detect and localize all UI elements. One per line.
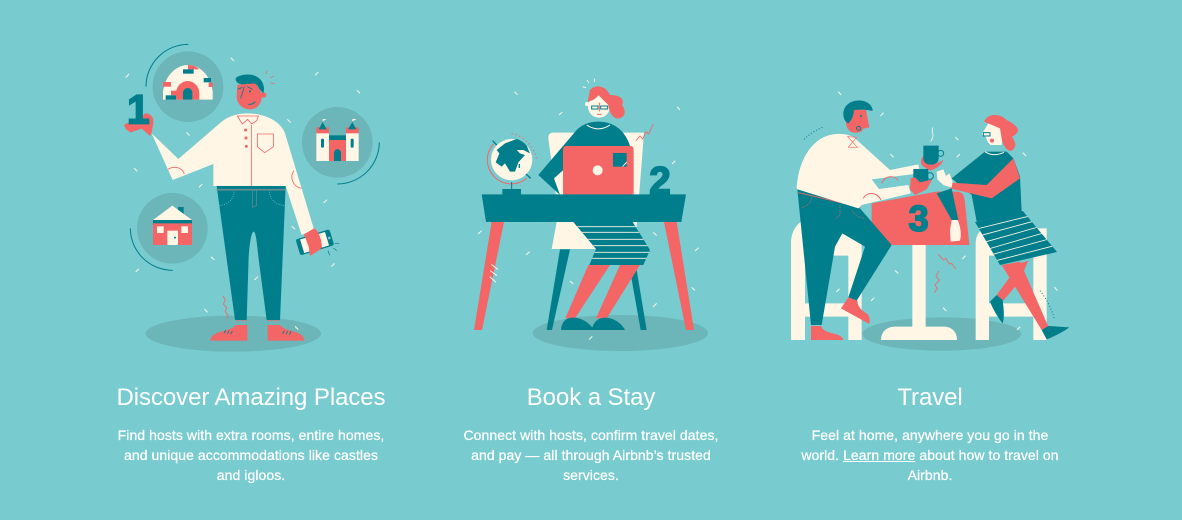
column: book xyxy=(464,384,718,483)
woman torso and arm xyxy=(538,122,633,195)
man shirt xyxy=(797,134,920,208)
text block xyxy=(801,427,1059,483)
striped skirt xyxy=(973,210,1057,265)
zigzag xyxy=(223,296,228,319)
text block: Find hosts with extra rooms, entire homes, xyxy=(118,427,384,443)
icon: castle badge xyxy=(302,107,373,178)
text block: and igloos. xyxy=(217,467,285,483)
striped skirt xyxy=(570,222,653,265)
sparkles xyxy=(837,92,1057,330)
text block: Airbnb. xyxy=(908,467,952,483)
sparkles xyxy=(478,92,698,339)
woman torso xyxy=(952,152,1022,222)
ground shadow xyxy=(146,316,321,352)
icon: igloo badge xyxy=(153,51,223,122)
text block: services. xyxy=(563,467,619,483)
laptop xyxy=(563,146,634,196)
woman other arm and hand xyxy=(937,188,961,242)
right stool xyxy=(976,228,1047,340)
zigzags xyxy=(934,254,956,293)
woman shoes xyxy=(561,318,625,330)
number 2: 2 xyxy=(649,160,671,203)
woman hand xyxy=(937,169,953,188)
left stool xyxy=(791,218,862,340)
woman arm xyxy=(950,158,1020,198)
man shoes xyxy=(210,325,304,341)
text block xyxy=(118,427,384,484)
ground shadow xyxy=(862,317,1021,351)
text block xyxy=(464,427,718,483)
ground shadow xyxy=(533,315,708,351)
dotted motion marks xyxy=(804,127,1054,318)
column: travel xyxy=(801,384,1059,483)
orbit arcs xyxy=(130,44,379,270)
woman legs xyxy=(997,252,1057,330)
coffee cups and hands xyxy=(910,127,944,195)
column: discover xyxy=(117,384,385,484)
man head xyxy=(843,100,873,133)
sparkles xyxy=(126,58,360,329)
text block: Feel at home, anywhere you go in the xyxy=(812,427,1048,443)
heading: Book a Stay xyxy=(527,384,655,411)
man shoes xyxy=(811,297,870,340)
necklace xyxy=(985,152,1004,155)
motion ticks xyxy=(266,71,275,84)
woman head xyxy=(583,79,625,118)
number 3: 3 xyxy=(909,198,929,239)
belt and pocket stitching xyxy=(217,190,291,335)
hand with phone xyxy=(296,228,339,256)
illustration: step 3 couple at table xyxy=(791,92,1069,351)
man trousers xyxy=(217,186,286,320)
desk xyxy=(474,194,694,330)
illustration: step 2 woman at desk xyxy=(474,79,708,351)
woman head xyxy=(982,115,1018,151)
buttons xyxy=(244,128,248,148)
illustration: step 1 man with places xyxy=(124,44,379,352)
text block: Connect with hosts, confirm travel dates, xyxy=(464,427,718,443)
text block: and unique accommodations like castles xyxy=(124,447,378,463)
necklace xyxy=(587,125,610,129)
heading: Discover Amazing Places xyxy=(117,384,385,411)
icon: house badge xyxy=(137,193,208,264)
text block: world. Learn more about how to travel on xyxy=(801,447,1059,463)
man trousers xyxy=(797,189,892,325)
man head xyxy=(236,75,266,109)
shirt details xyxy=(168,116,301,188)
heading: Travel xyxy=(897,384,963,411)
zigzag xyxy=(636,124,653,141)
globe xyxy=(487,134,537,195)
number 1: 1 xyxy=(127,86,150,132)
raised hand xyxy=(124,113,153,136)
elbow patches and bow tie xyxy=(848,137,898,200)
text block: and pay — all through Airbnb’s trusted xyxy=(471,447,711,463)
table xyxy=(872,192,969,340)
man shirt xyxy=(152,113,314,235)
trouser stitching xyxy=(798,193,860,207)
chair xyxy=(547,133,647,330)
woman legs xyxy=(565,265,640,318)
woman shoes xyxy=(990,295,1069,339)
